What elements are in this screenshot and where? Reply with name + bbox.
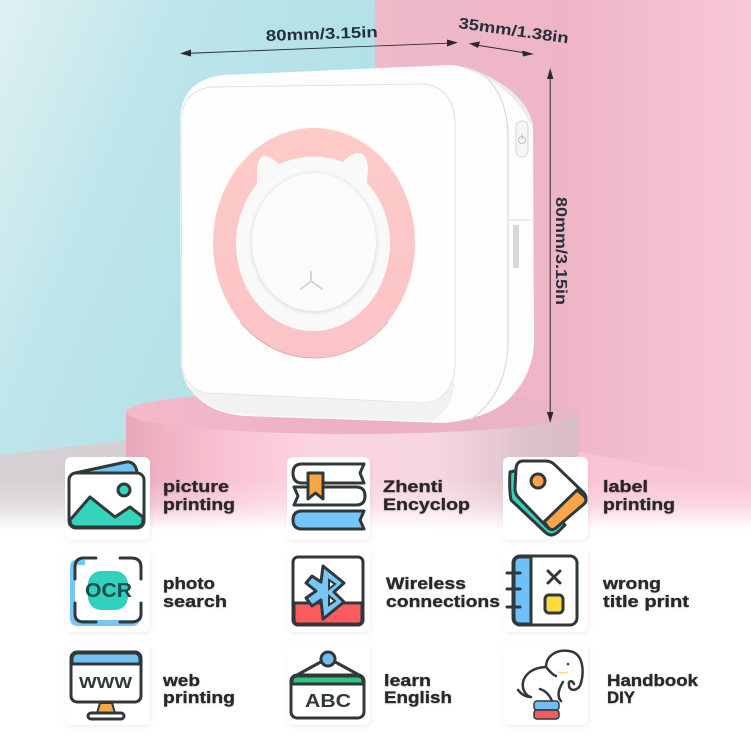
background: teal wall bbox=[0, 0, 375, 460]
label: label printing bbox=[603, 477, 675, 514]
centre button shadow bbox=[250, 172, 378, 314]
label: wrong title print: title print bbox=[603, 592, 689, 611]
width label: 80mm/3.15in bbox=[266, 24, 378, 45]
label: Handbook DIY: DIY bbox=[607, 688, 636, 707]
label: picture printing: picture bbox=[163, 477, 229, 496]
top right highlight bbox=[455, 66, 533, 130]
label: photo search: search bbox=[163, 592, 227, 611]
dimension: width bbox=[180, 24, 458, 57]
printer body bbox=[180, 65, 534, 423]
bottom bevel bbox=[186, 375, 455, 421]
dimension: depth bbox=[457, 15, 570, 57]
depth arrow bbox=[469, 42, 534, 56]
icon: elephant on books bbox=[503, 644, 588, 725]
cat head disc with ears bbox=[236, 153, 390, 331]
background: pink floor right bbox=[577, 452, 751, 530]
depth label: 35mm/1.38in bbox=[457, 15, 570, 47]
ring lower edge bbox=[240, 322, 388, 358]
label: learn English: English bbox=[384, 688, 452, 707]
pedestal top bbox=[126, 390, 578, 434]
label: Zhenti Encyclop bbox=[383, 477, 470, 514]
power button bbox=[516, 121, 528, 157]
usb port bbox=[509, 220, 532, 268]
logo mark bbox=[301, 272, 322, 289]
icon: notebook bbox=[503, 550, 588, 632]
label: photo search: photo bbox=[163, 574, 215, 593]
front face bbox=[181, 84, 455, 403]
height arrow bbox=[547, 68, 553, 423]
centre button bbox=[252, 173, 376, 311]
label: Handbook DIY: Handbook bbox=[607, 671, 699, 690]
icon: price tag bbox=[503, 457, 588, 540]
icon: picture printing bbox=[65, 457, 150, 540]
label: Handbook DIY bbox=[607, 671, 699, 707]
icon: web printing bbox=[65, 644, 150, 725]
label: web printing: printing bbox=[163, 688, 235, 707]
background: grey floor left bbox=[0, 440, 126, 530]
icon: books bbox=[287, 457, 370, 540]
printer bbox=[180, 65, 534, 423]
pink ring bbox=[213, 128, 415, 358]
icon: web printing: WWW bbox=[79, 675, 133, 692]
background: fade to white bbox=[0, 478, 751, 530]
icon: bluetooth bbox=[287, 550, 370, 632]
label: wrong title print bbox=[602, 574, 689, 611]
label: web printing: web bbox=[162, 671, 200, 690]
background: pink wall bbox=[375, 0, 751, 500]
icon: hanging ABC sign bbox=[287, 644, 370, 725]
label: picture printing: printing bbox=[163, 495, 235, 514]
height label: 80mm/3.15in bbox=[552, 197, 569, 305]
label: picture printing bbox=[163, 477, 235, 514]
side seam bbox=[470, 72, 508, 420]
label: web printing bbox=[162, 671, 235, 707]
label: wrong title print: wrong bbox=[602, 574, 661, 593]
icon: hanging ABC sign: ABC bbox=[305, 691, 351, 711]
label: label printing: printing bbox=[603, 495, 675, 514]
label: learn English: learn bbox=[384, 671, 431, 690]
label: Wireless connections bbox=[386, 574, 500, 611]
icon: OCR photo search: OCR bbox=[85, 580, 133, 602]
label: Wireless connections: Wireless bbox=[386, 574, 466, 593]
width arrow bbox=[180, 40, 458, 56]
label: Zhenti Encyclop: Zhenti bbox=[383, 477, 443, 496]
pedestal bbox=[126, 390, 578, 530]
label: photo search bbox=[163, 574, 227, 611]
pedestal side bbox=[126, 412, 578, 530]
label: Wireless connections: connections bbox=[386, 592, 500, 611]
label: Zhenti Encyclop: Encyclop bbox=[383, 495, 470, 514]
dimension: height bbox=[547, 68, 569, 423]
label: learn English bbox=[384, 671, 452, 707]
icon: OCR photo search bbox=[65, 550, 150, 632]
label: label printing: label bbox=[603, 477, 648, 496]
